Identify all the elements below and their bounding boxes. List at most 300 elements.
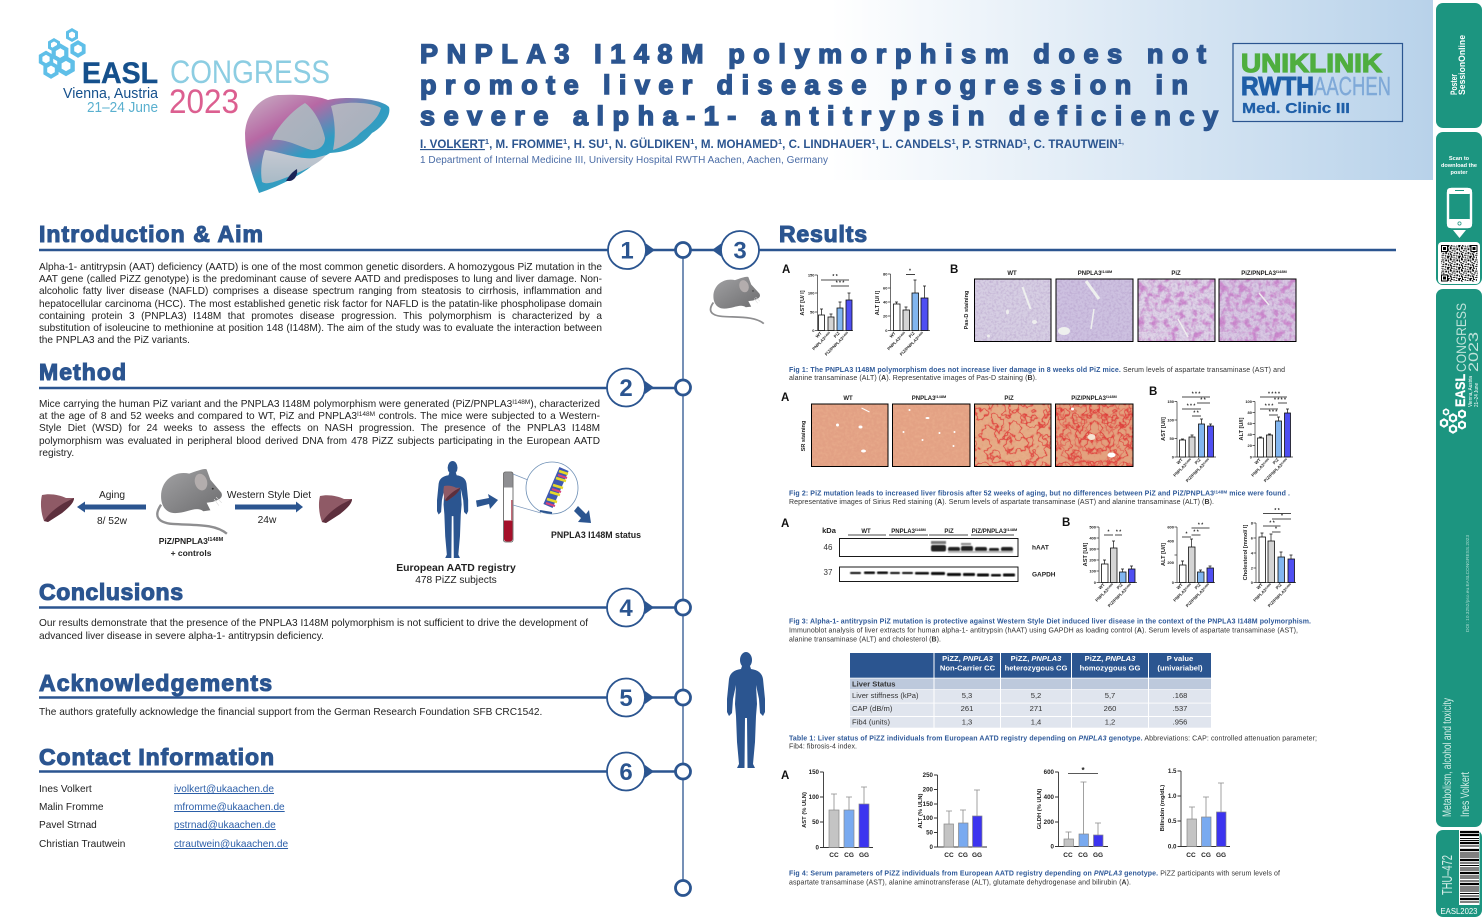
timeline node 3 results [691,231,1396,269]
text block: method: registry. [39,448,74,459]
image: SR WT: WT [843,396,853,402]
table row: CAP: CAP (dB/m) [852,704,893,713]
chart: fig 3 ALT: WT [1176,582,1184,590]
chart: fig 4 GLDH: 200 [1044,819,1055,826]
chart: fig 3 ALT: * * [1198,522,1203,528]
table row: CAP: 271 [1030,704,1042,713]
chart: fig 1 AST: 100 [808,290,815,296]
table row: liver status [850,678,1211,689]
contact: Christian Trautwein: ctrautwein@ukaachen.de [174,839,288,850]
table row: CAP: 261 [961,704,973,713]
chart: fig 2 AST: 50 [1170,436,1175,441]
chart: fig 4 AST: AST (% ULN) [802,792,808,828]
sidebar: poster id and barcode [1436,830,1482,917]
table header row: P value [1167,654,1193,663]
table row: liver status: Liver Status [852,680,895,688]
heading: Contact Information: Contact Information [39,744,274,770]
timeline node 3 results: 3 [733,238,747,264]
icon: phone [1447,188,1472,228]
table row: liver stiffness: 5,7 [1105,691,1115,700]
contact: Malin Fromme: mfromme@ukaachen.de [174,802,285,813]
table row: Fib4: Fib4 (units) [852,718,890,726]
chart: fig 2 AST: 150 [1167,399,1175,404]
EASL Congress logo [41,30,330,121]
timeline node 2: 2 [619,375,633,402]
chart: fig 4 bilirubin: 1.0 [1168,793,1177,800]
chart: fig 1 ALT: 80 [883,272,888,276]
chart: fig 4 AST: CG [844,852,854,859]
timeline node 1 [39,231,690,269]
image: SR PiZ: PiZ [1004,396,1014,402]
blot lane headers: PiZ/PNPLA3I148M [972,526,1017,535]
EASL Congress logo: EASL [82,57,158,90]
chart: fig 1 AST: PiZ [833,330,841,339]
caption: figure 3: Immunoblot analysis of liver extracts for human alpha-1- antitrypsin (hAAT) using GAPDH as loading control (A). Serum levels of aspartate transaminase (AST), [789,628,1298,634]
chart: fig 2 ALT [1239,392,1293,483]
label: aging: Aging [99,490,125,501]
sidebar congress logo: CONGRESS [1453,303,1469,372]
chart: fig 4 bilirubin: CC [1186,852,1196,859]
caption: figure 2: Fig 2: PiZ mutation leads to increased liver fibrosis after 52 weeks of aging, but no differences between PiZ and PiZ/PNPLA3I148M mice were found . [789,489,1290,498]
table row: Fib4: 1,4 [1031,718,1041,726]
chart: fig 2 AST [1161,392,1216,483]
table header row: homozygous GG [1080,664,1140,672]
timeline connector with nodes [39,231,1396,896]
image: Pas-D PNPLA3: PNPLA3I148M [1078,268,1112,277]
chart: fig 3 AST: 500 [1089,524,1097,530]
heading: Conclusions: Conclusions [39,579,183,605]
text block: introduction: Alpha-1- antitrypsin (AAT) deficiency (AATD) is one of the most common genetic disorders. A homozygous PiZ mutation in the [39,262,602,273]
text block: method: Mice carrying the human PiZ variant and the PNPLA3 I148M polymorphism were generated (PiZ/PNPLA3I148M), characterized [39,399,600,410]
chart: fig 4 GLDH: * [1081,766,1085,775]
caption: figure 1 [789,367,1285,382]
chart: fig 3 AST: PiZ [1116,582,1124,590]
text block: conclusions: Our results demonstrate that the presence of the PNPLA3 I148M polymorphism is not sufficient to drive the development of [39,618,588,629]
label: western style diet: Western Style Diet [227,490,311,501]
chart: fig 1 AST: 0 [812,328,815,333]
chart: fig 2 AST: AST [U/l] [1161,417,1167,441]
scan text: poster [1450,170,1468,176]
chart: fig 3 ALT: 400 [1167,538,1175,544]
chart: fig 4 ALT: 100 [923,815,934,822]
image: SR WT [812,396,888,467]
arrow: to blood sample [476,494,498,509]
chart: fig 3 cholesterol: 4 [1251,550,1254,556]
chart: fig 1 AST: * * * [836,280,844,286]
text block: introduction: substitution of isoleucine to methionine at position 148 (I148M). The aim of the study was to evaluate the interaction between [39,323,602,334]
text block: conclusions: advanced liver disease in severe alpha-1- antitrypsin deficiency. [39,631,324,642]
blot: hAAT [824,538,1049,556]
table row: Fib4: 1,3 [962,718,972,726]
caption: table 1: Fib4: fibrosis-4 index. [789,744,857,750]
text block: conclusions [39,618,588,642]
text block: introduction: AAT gene (called PiZZ genotype) is the predominant cause of severe AATD and predisposes to lung and liver damage. Non- [39,274,602,285]
chart: fig 2 ALT: 0 [1250,454,1253,460]
chart: fig 2 ALT: PiZ/PNPLA3I148M [1262,456,1289,483]
EASL Congress logo: Vienna, Austria [63,85,159,102]
chart: fig 3 AST: 300 [1089,546,1097,552]
table row: Fib4 [850,717,1211,728]
university logo: AACHEN [1314,71,1391,101]
caption: figure 4: aspartate transaminase (AST), alanine aminotransferase (ALT), glutamate dehydrogenase and bilirubin (A). [789,880,1131,886]
icon: triangle pointer [1453,230,1466,238]
chart: fig 4 ALT: CG [958,852,968,859]
chart: fig 3 AST: 200 [1089,558,1097,562]
blot: hAAT: 46 [824,543,833,552]
chart: fig 2 AST: * * * [1192,392,1200,398]
contact: Christian Trautwein: Christian Trautwein [39,839,125,850]
contact: Christian Trautwein [39,839,288,850]
chart: fig 4 AST [802,769,873,859]
image: Pas-D WT [974,271,1052,342]
text block: acknowledgements: The authors gratefully acknowledge the financial support from the German Research Foundation SFB CRC1542. [39,707,542,718]
sidebar: poster session online [1436,3,1482,128]
chart: fig 1 ALT: 60 [883,286,888,290]
chart: fig 4 GLDH: GG [1093,852,1103,859]
arrow: aging [77,502,146,512]
table row: liver stiffness: Liver stiffness (kPa) [852,691,919,700]
chart: fig 3 AST: AST [U/l] [1083,543,1089,566]
chart: fig 3 cholesterol: * * [1274,508,1280,514]
chart: fig 2 ALT: * * * * [1268,392,1280,398]
icon: DNA magnifier [513,462,578,514]
chart: fig 2 ALT: ALT [U/l] [1239,417,1245,440]
chart: fig 1 AST: WT [815,330,823,339]
image: Pas-D PiZ [1138,271,1215,342]
contact: Pavel Strnad: pstrnad@ukaachen.de [174,820,276,831]
chart: fig 3 AST: 400 [1089,536,1097,540]
blot lane headers: kDa [822,526,837,535]
chart: fig 1 AST: PNPLA3I148M [811,330,832,351]
chart: fig 4 ALT [918,772,987,859]
chart: fig 4 AST: CC [829,852,839,859]
western blot [822,526,1056,582]
table header row: heterozygous CG [1005,664,1068,672]
chart: fig 4 bilirubin: CG [1201,852,1211,859]
chart: fig 4 ALT: GG [972,852,982,859]
chart: fig 3 AST: PiZ/PNPLA3I148M [1106,581,1133,608]
chart: fig 3 ALT: PiZ [1194,582,1202,590]
image: Pas-D WT: WT [1007,271,1017,277]
blot: hAAT: hAAT [1032,544,1049,552]
chart: fig 2 AST: * * [1193,410,1199,416]
panel letter A: A [781,392,789,404]
blot: GAPDH [824,567,1056,582]
panel letter A: A [781,518,789,530]
chart: fig 4 GLDH: 400 [1044,794,1055,801]
chart: fig 3 ALT: PiZ/PNPLA3I148M [1184,581,1211,608]
contact information [39,784,288,850]
chart: fig 4 ALT: 150 [923,801,934,808]
panel letter B: B [950,264,958,276]
heading: Introduction & Aim: Introduction & Aim [39,221,263,247]
timeline end node [676,880,690,896]
presenter name: Ines Volkert [1458,772,1472,817]
caption: figure 1: Fig 1: The PNPLA3 I148M polymorphism does not increase liver damage in 8 weeks old PiZ mice. Serum levels of aspartate transaminase (AST) and [789,367,1285,374]
chart: fig 1 AST: PiZ/PNPLA3I148M [823,330,850,357]
chart: fig 1 AST: * * [832,274,838,280]
chart: fig 4 bilirubin: GG [1216,852,1226,859]
chart: fig 4 bilirubin [1160,768,1230,859]
image: SR PiZ [974,396,1052,467]
text block: method: Style Diet (WSD) for 24 weeks to assess the effects on NASH progression. The presence of the PNPLA3 I148M [39,423,600,434]
sidebar congress logo: 2023 [1465,332,1481,372]
chart: fig 2 ALT: PNPLA3I148M [1250,456,1271,478]
chart: fig 3 cholesterol: * [1275,526,1277,532]
blot: GAPDH: 37 [824,568,833,577]
method diagram: mouse model [41,469,352,558]
label: subjects: 478 PiZZ subjects [415,575,497,586]
caption: figure 2 [789,489,1290,506]
arrow: to status [574,506,591,523]
table header row: PiZZ, PNPLA3 [942,654,993,663]
text block: introduction: the PNPLA3 and the PiZ variants. [39,335,190,346]
chart: fig 1 ALT: ALT [U/ l] [875,291,881,315]
chart: fig 2 AST: 0 [1172,454,1175,460]
EASL Congress logo: CONGRESS [170,54,330,90]
liver illustration [245,95,389,193]
table row: liver stiffness [850,690,1211,703]
image: Pas-D PiZ: PiZ [1171,271,1181,277]
chart: fig 2 ALT: 100 [1245,399,1253,404]
chart: fig 1 ALT: PiZ [908,330,916,339]
title: severe alpha-1- antitrypsin deficiency [420,101,1218,131]
chart: fig 1 AST [800,272,853,357]
chart: fig 3 cholesterol: WT [1256,582,1264,590]
table header row: Non-Carrier CC [940,664,996,672]
contact: Pavel Strnad: Pavel Strnad [39,820,97,831]
chart: fig 4 AST: 0 [816,844,820,852]
title: PNPLA3 I148M polymorphism does not [420,39,1206,69]
table header row [850,653,1211,678]
chart: fig 4 GLDH: 0 [1051,844,1055,850]
chart: fig 3 cholesterol: Cholesterol [mmol/ l] [1243,525,1249,580]
icon: liver left [41,494,74,522]
chart: fig 3 ALT: * [1186,532,1188,538]
chart: fig 3 ALT: ALT [U/l] [1161,543,1167,566]
timeline node 5: 5 [619,685,633,712]
chart: fig 4 GLDH: GLDH (% ULN) [1037,789,1043,829]
caption: figure 1: alanine transaminase (ALT) (A). Representative images of Pas-D staining (B). [789,375,1037,382]
timeline node 4: 4 [619,595,633,622]
title [420,39,1218,131]
chart: fig 4 ALT: CC [944,852,954,859]
chart: fig 2 ALT: PiZ [1272,457,1280,465]
icon: human results [727,652,765,768]
chart: fig 2 ALT: 80 [1248,410,1253,415]
chart: fig 3 ALT: PNPLA3I148M [1172,581,1193,603]
caption: figure 4 [789,870,1280,886]
chart: fig 3 AST: 100 [1089,568,1097,574]
DOI text: DOI: 10.3252/pso.eu.EASLCONGRESS.2023 [1465,535,1470,632]
chart: fig 2 ALT: * * * * [1274,398,1286,404]
image label: SR staining: SR staining [801,420,807,451]
header background band [0,0,1433,180]
panel letter A: A [782,264,790,276]
table: liver status [850,653,1211,728]
chart: fig 1 ALT: 20 [883,314,888,318]
sidebar congress logo: 21–24 June [1474,383,1480,407]
figure 2 panel [781,386,1293,506]
affiliation: 1 Department of Internal Medicine III, University Hospital RWTH Aachen, Aachen, Germany [420,155,828,166]
timeline node 2 [39,368,690,406]
panel letter B: B [1149,386,1157,398]
figure 1 panel [782,264,1296,382]
chart: fig 3 ALT: * * [1193,530,1199,536]
blot lane headers: PNPLA3I148M [891,526,926,535]
chart: fig 2 AST: * * * [1187,404,1195,410]
timeline node 5 [39,678,690,716]
chart: fig 1 AST: 150 [808,272,815,278]
caption: table 1 [789,736,1317,750]
chart: fig 1 AST: AST [U/ l] [800,290,806,316]
blot lane headers: PiZ [944,529,954,535]
timeline node 6 [39,752,690,790]
chart: fig 3 cholesterol: 0 [1251,580,1254,585]
contact: Pavel Strnad [39,820,276,831]
contact: Ines Volkert [39,784,274,795]
label: 24 weeks: 24w [258,515,277,526]
chart: fig 4 bilirubin: 0.5 [1168,818,1177,825]
chart: fig 2 ALT: * * * [1269,410,1277,416]
table row: CAP: .537 [1173,704,1187,713]
image: SR PNPLA3 [892,394,970,467]
EASL Congress logo: 2023 [169,83,239,121]
session topic: Metabolism, alcohol and toxicity [1440,698,1454,817]
chart: fig 1 ALT: PNPLA3I148M [886,330,907,351]
chart: fig 4 bilirubin: 0.0 [1168,844,1177,850]
chart: fig 4 AST: 50 [812,819,820,826]
arrow: diet [235,502,303,512]
table header row: PiZZ, PNPLA3 [1085,654,1135,663]
panel letter B: B [1062,517,1070,529]
figure 3 panel [781,508,1311,644]
chart: fig 2 ALT: WT [1254,457,1262,465]
chart: fig 1 ALT: 40 [883,300,888,304]
title: promote liver disease progression in [420,70,1188,100]
heading: Results: Results [779,221,867,247]
scan text: download the [1441,163,1477,169]
chart: fig 3 AST: * [1108,530,1110,536]
chart: fig 4 GLDH: 600 [1044,769,1055,776]
chart: fig 1 ALT: PiZ/PNPLA3I148M [898,330,925,357]
chart: fig 4 bilirubin: 1.5 [1168,768,1177,775]
chart: fig 4 AST: GG [859,852,869,859]
text block: introduction [39,262,602,346]
authors: I. VOLKERT1, M. FROMME1, H. SU1, N. GÜLDIKEN1, M. MOHAMED1, C. LINDHAUER1, L. CANDELS1, P. STRNAD1, C. TRAUTWEIN1, [420,136,1124,151]
chart: fig 2 AST: PiZ/PNPLA3I148M [1184,456,1211,483]
QR code [1438,242,1480,284]
chart: fig 4 ALT: 50 [926,830,934,836]
caption: table 1: Table 1: Liver status of PiZZ individuals from European AATD registry depending on PNPLA3 genotype. Abbreviations: CAP: controlled attenuation parameter; [789,736,1317,742]
chart: fig 2 ALT: * * * [1265,404,1273,410]
chart: fig 4 AST: 150 [809,769,820,776]
table row: CAP [850,704,1211,716]
contact: Ines Volkert: Ines Volkert [39,784,92,795]
text block: method: at the age of 8 and 52 weeks and compared to WT, PiZ and PNPLA3I148M controls. The mice were subjected to a Western- [39,411,600,422]
chart: fig 2 ALT: 20 [1248,443,1253,448]
chart: fig 4 GLDH: CC [1063,852,1073,859]
icon: mouse results [711,277,764,324]
caption: figure 3: Fig 3: Alpha-1- antitrypsin PiZ mutation is protective against Western Style Diet induced liver disease in the context of the PNPLA3 I148M polymorphism. [789,618,1311,626]
image: SR PiZ/PNPLA3: PiZ/PNPLA3I148M [1071,394,1117,402]
scan text: Scan to [1449,156,1470,162]
figure 4 panel [781,766,1280,886]
chart: fig 3 cholesterol: 6 [1251,536,1254,540]
contact: Malin Fromme: Malin Fromme [39,802,104,813]
chart: fig 3 ALT: 200 [1167,560,1175,565]
caption: figure 2: Representative images of Sirius Red staining (A). Serum levels of aspartate transaminase (AST) and alanine transaminase (ALT) (B). [789,499,1214,506]
chart: fig 1 AST: 50 [810,310,815,314]
blot: GAPDH: GAPDH [1032,572,1056,578]
chart: fig 3 ALT: 600 [1167,524,1175,530]
chart: fig 3 AST: * * [1116,530,1121,536]
icon: mouse [157,469,227,534]
text block: method: polymorphism was evaluated in peripheral blood derived DNA from 478 PiZZ subjects participating in the European AATD [39,436,600,447]
text block: introduction: hepatocellular carcinoma (HCC). The most established genetic risk factor for NAFLD is the patatin-like phospholipase domain [39,299,602,310]
chart: fig 3 cholesterol: * [1281,514,1283,520]
chart: fig 4 GLDH [1037,766,1108,859]
sidebar: scan to download [1436,132,1482,285]
chart: fig 1 ALT [875,268,930,357]
table row: Fib4: .956 [1173,718,1187,726]
timeline node 1: 1 [620,238,634,264]
blot lane headers: WT [861,529,871,535]
chart: fig 2 AST: WT [1176,457,1184,465]
timeline node 6: 6 [619,759,633,786]
chart: fig 4 ALT: 200 [923,786,934,794]
image: Pas-D PNPLA3 [1056,268,1133,342]
chart: fig 1 ALT: 0 [885,328,888,333]
table row: CAP: 260 [1104,704,1116,713]
caption: figure 3 [789,618,1311,644]
panel letter A: A [781,770,789,782]
sidebar: poster session online: Poster [1449,74,1460,95]
label: status: PNPLA3 I148M status [551,530,641,540]
chart: fig 3 ALT: 0 [1172,580,1175,585]
table row: liver stiffness: 5,3 [962,691,972,700]
blot lane headers [822,526,1017,535]
text block: method [39,399,600,459]
chart: fig 3 cholesterol: PiZ [1275,582,1283,590]
chart: fig 4 GLDH: CG [1078,852,1088,859]
caption: figure 4: Fig 4: Serum parameters of PiZZ individuals from European AATD registry depending on PNPLA3 genotype. PiZZ participants with serum levels of [789,870,1280,878]
heading: Acknowledgements: Acknowledgements [39,670,272,696]
chart: fig 1 ALT: * [909,268,911,274]
table header row: (univariabel) [1157,664,1203,672]
table row: Fib4: 1,2 [1105,718,1115,726]
icon: liver right [319,495,352,523]
chart: fig 4 ALT: 250 [923,772,934,779]
chart: fig 2 ALT: 40 [1248,432,1253,437]
EASL Congress logo: 21–24 June [87,99,158,116]
text block: introduction: containing protein 3 (PNPLA3) I148M that promotes disease progression. This polymorphism is characterized by a [39,311,602,322]
chart: fig 3 AST: 0 [1094,580,1097,585]
chart: fig 4 ALT: 0 [930,844,934,851]
sidebar congress logo: EASL [1452,374,1468,407]
icon: blood tube [504,472,513,542]
contact: Ines Volkert: ivolkert@ukaachen.de [174,784,274,795]
image: Pas-D PiZ/PNPLA3 [1219,268,1296,342]
label: registry: European AATD registry [396,563,516,574]
chart: fig 3 AST: PNPLA3I148M [1094,581,1115,603]
sidebar congress logo [1441,303,1481,433]
chart: fig 3 cholesterol: PiZ/PNPLA3I148M [1266,581,1293,608]
chart: fig 3 AST: WT [1098,582,1106,590]
contact: Malin Fromme [39,802,285,813]
sidebar: congress and session [1436,289,1482,827]
chart: fig 3 AST [1083,524,1137,608]
